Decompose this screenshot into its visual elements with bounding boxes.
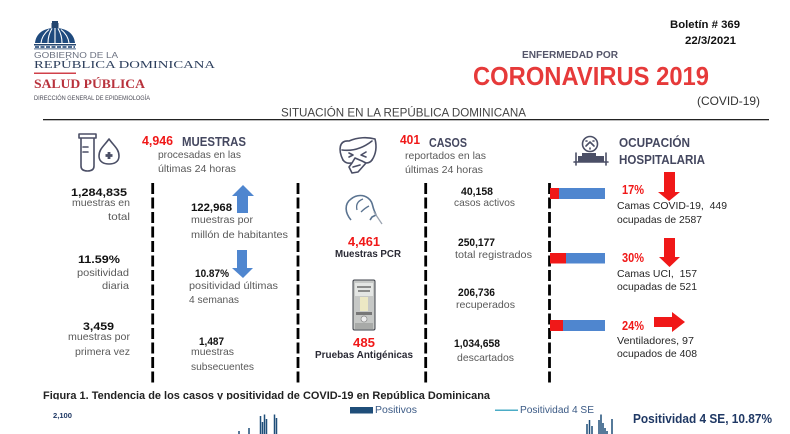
stat: ventiladores: 24% (622, 319, 644, 333)
icon: dome (34, 21, 76, 49)
heading: muestras (142, 134, 246, 175)
stat: first-time samples: 3,459 (83, 321, 114, 333)
stat: camas COVID: ocupadas de 2587 (617, 214, 702, 226)
stat: subsequent samples: subsecuentes (191, 361, 254, 373)
stat: PCR (335, 235, 402, 260)
panel: ocupación hospitalaria (550, 135, 727, 360)
legend: positivos (350, 405, 417, 416)
title: ENFERMEDAD POR (522, 49, 618, 61)
chart bars (239, 414, 612, 434)
heading: muestras: 4,946 (142, 134, 173, 148)
stat: first-time samples: muestras por (68, 331, 131, 343)
bulletin number and date: 22/3/2021 (685, 35, 736, 47)
arrow: down red (658, 172, 680, 201)
stat: ventiladores: Ventiladores, 97 (617, 335, 694, 347)
stat: ventiladores (550, 312, 697, 360)
stat: recovered (456, 287, 515, 311)
stat: discarded (454, 338, 514, 364)
government name: GOBIERNO DE LA (34, 51, 119, 60)
chart: cropped case trend (53, 405, 772, 434)
heading: muestras: últimas 24 horas (158, 163, 236, 175)
stat: total registered: 250,177 (458, 237, 495, 249)
stat: total registered: total registrados (455, 249, 532, 261)
icon: face with mask (340, 138, 376, 173)
stat: discarded: descartados (457, 352, 514, 364)
bar: 17 percent (550, 188, 605, 199)
stat: active cases (454, 186, 515, 209)
heading: ocupación hospitalaria: OCUPACIÓN (619, 135, 690, 150)
logo: Gobierno de la República Dominicana (34, 21, 215, 102)
stat: 4-week positivity: 10.87% (195, 268, 229, 280)
stat: samples per million: 122,968 (191, 202, 232, 214)
bulletin number and date: Boletín # 369 (670, 19, 740, 31)
figure caption: Figura 1. Tendencia de los casos y positividad de COVID-19 en República Dominicana (43, 390, 491, 402)
stat: camas COVID: Camas COVID-19, 449 (617, 200, 727, 212)
stat: first-time samples (68, 321, 131, 358)
bar: 24 percent (550, 320, 605, 331)
heading: casos: 401 (400, 133, 420, 147)
title: CORONAVIRUS 2019 (473, 61, 709, 91)
chart: cropped case trend: 2,100 (53, 413, 72, 420)
callout: positividad: Positividad 4 SE, 10.87% (633, 411, 772, 426)
heading: casos: reportados en las (405, 150, 486, 162)
bulletin number and date (670, 19, 740, 47)
arrow: right red (654, 312, 685, 332)
legend: positividad 4 SE: Positividad 4 SE (520, 405, 594, 416)
stat: subsequent samples: 1,487 (199, 336, 224, 348)
stat: PCR: 4,461 (348, 235, 380, 249)
stat: PCR: Muestras PCR (335, 249, 402, 260)
stat: total samples: 1,284,835 (71, 187, 127, 199)
icon: test tube and blood drop (79, 134, 119, 171)
stat: 4-week positivity (189, 268, 278, 306)
stat: subsequent samples (191, 336, 254, 373)
arrow: up (232, 185, 254, 213)
heading: casos: CASOS (429, 135, 467, 150)
stat: antigen tests: Pruebas Antigénicas (315, 349, 413, 361)
stat: samples per million: millón de habitantes (191, 229, 288, 241)
stat: total registered (455, 237, 532, 261)
stat: 4-week positivity: positividad últimas (189, 280, 278, 292)
stat: antigen tests (315, 336, 413, 361)
icon: antigen test cassette (353, 280, 375, 330)
panel: casos (315, 133, 532, 364)
legend: positivos: Positivos (375, 405, 417, 416)
stat: samples per million: muestras por (191, 214, 254, 226)
subtitle: SITUACIÓN EN LA REPÚBLICA DOMINICANA (281, 104, 526, 120)
stat: daily positivity: diaria (102, 280, 129, 292)
logo: Gobierno de la República Dominicana: DIRECCIÓN GENERAL DE EPIDEMIOLOGÍA (34, 95, 150, 102)
arrow: down red (659, 238, 680, 267)
ministry name: SALUD PÚBLICA (34, 77, 145, 91)
stat: subsequent samples: muestras (191, 346, 234, 358)
heading: casos: últimas 24 horas (405, 164, 483, 176)
stat: camas UCI: 30% (622, 251, 644, 265)
heading: ocupación hospitalaria (619, 135, 706, 167)
title: (COVID-19) (697, 94, 760, 108)
heading: ocupación hospitalaria: HOSPITALARIA (619, 152, 706, 167)
stat: daily positivity: 11.59% (78, 254, 120, 266)
bar: 30 percent (550, 253, 605, 264)
title (473, 49, 760, 108)
heading: casos (400, 133, 486, 176)
stat: recovered: 206,736 (458, 287, 495, 299)
stat: 4-week positivity: 4 semanas (189, 294, 239, 306)
arrow: down (232, 250, 253, 278)
stat: camas UCI: Camas UCI, 157 (617, 268, 697, 280)
stat: active cases: casos activos (454, 197, 515, 209)
icon: hospital bed with virus (574, 136, 608, 165)
stat: camas COVID (550, 172, 727, 226)
logo: Gobierno de la República Dominicana: REPÚBLICA DOMINICANA (34, 59, 215, 71)
stat: total samples (71, 187, 130, 223)
heading: muestras: procesadas en las (158, 149, 241, 161)
stat: first-time samples: primera vez (75, 346, 130, 358)
stat: samples per million (191, 202, 288, 241)
stat: daily positivity (77, 254, 129, 292)
stat: ventiladores: ocupados de 408 (617, 348, 697, 360)
stat: camas COVID: 17% (622, 183, 644, 197)
heading: muestras: MUESTRAS (182, 134, 246, 149)
stat: active cases: 40,158 (461, 186, 493, 198)
stat: recovered: recuperados (456, 299, 515, 311)
stat: camas UCI: ocupadas de 521 (617, 281, 697, 293)
icon: nasal swab (346, 196, 382, 224)
stat: total samples: total (108, 211, 130, 223)
stat: antigen tests: 485 (353, 336, 375, 350)
stat: total samples: muestras en (72, 197, 130, 209)
stat: camas UCI (550, 238, 697, 293)
panel: muestras (68, 134, 288, 373)
stat: discarded: 1,034,658 (454, 338, 500, 350)
stat: daily positivity: positividad (77, 267, 129, 279)
